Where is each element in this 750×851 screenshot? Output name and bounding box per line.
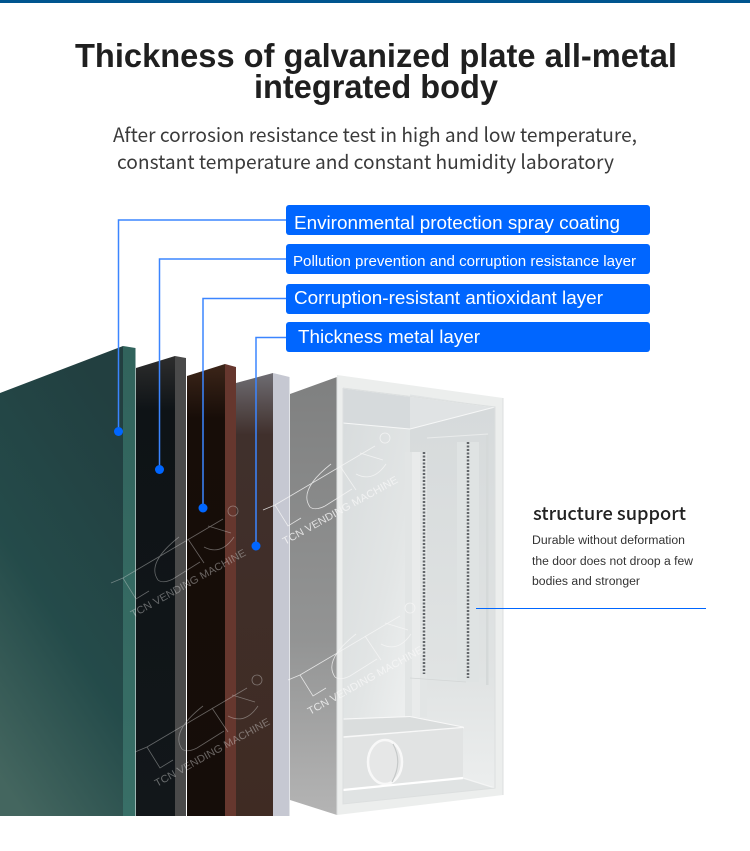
structure support description — [532, 535, 694, 588]
subtitle — [113, 119, 637, 175]
cabinet rails — [405, 434, 488, 717]
subtitle: After corrosion resistance test in high and low temperature, — [113, 119, 637, 148]
layer: metal — [236, 373, 290, 816]
cabinet outer side — [290, 377, 337, 815]
title: integrated body — [254, 68, 499, 105]
layer: green spray coating — [0, 346, 136, 816]
watermark: TCN vending machine, lower cabinet — [288, 603, 425, 718]
leader line: spray coating — [114, 220, 286, 436]
label: antioxidant layer: Corruption-resistant antioxidant layer — [294, 288, 603, 308]
cabinet floor — [343, 778, 495, 804]
layer: brown antioxidant — [187, 364, 236, 816]
leader line: metal layer — [252, 338, 286, 550]
title: Thickness of galvanized plate all-metal — [75, 37, 677, 74]
label: metal layer: Thickness metal layer — [298, 327, 480, 347]
cabinet body — [290, 375, 503, 815]
leader line: antioxidant layer — [198, 298, 286, 512]
cabinet ceiling — [343, 388, 495, 429]
label: pollution layer — [286, 244, 650, 274]
structure support heading: structure support — [533, 500, 687, 526]
perforated strip right — [467, 442, 469, 678]
label: metal layer — [286, 322, 650, 352]
cabinet lower panel — [343, 728, 463, 790]
cabinet shelf — [343, 716, 464, 737]
leader line: pollution layer — [155, 259, 286, 474]
label: antioxidant layer — [286, 284, 650, 314]
structure support description: the door does not droop a few — [532, 556, 694, 568]
perforated strip left — [423, 452, 425, 674]
subtitle: constant temperature and constant humidity laboratory — [117, 146, 614, 175]
cabinet right wall — [410, 407, 495, 788]
label: spray coating: Environmental protection spray coating — [294, 213, 620, 233]
watermark: TCN vending machine, left: TCN VENDING MACHINE — [129, 547, 248, 621]
structure callout line — [476, 608, 706, 610]
watermark: TCN vending machine, lower cabinet: TCN VENDING MACHINE — [306, 644, 425, 718]
watermark: TCN vending machine, upper cabinet: TCN VENDING MACHINE — [281, 474, 400, 548]
cabinet back wall — [343, 423, 410, 720]
top bar — [0, 0, 750, 3]
watermark: TCN vending machine, left — [111, 506, 248, 621]
cabinet front frame — [337, 375, 503, 815]
structure support description: bodies and stronger — [532, 576, 640, 588]
cable hole — [368, 740, 402, 784]
title — [75, 37, 677, 105]
label: pollution layer: Pollution prevention and corruption resistance layer — [293, 254, 636, 270]
layer: black anti-corrosion — [136, 356, 186, 816]
structure support description: Durable without deformation — [532, 535, 685, 547]
cabinet front frame inner lines — [337, 377, 503, 815]
watermark: TCN vending machine, bottom — [135, 675, 272, 790]
label: spray coating — [286, 205, 650, 235]
watermark: TCN vending machine, upper cabinet — [263, 433, 400, 548]
watermark: TCN vending machine, bottom: TCN VENDING MACHINE — [153, 716, 272, 790]
